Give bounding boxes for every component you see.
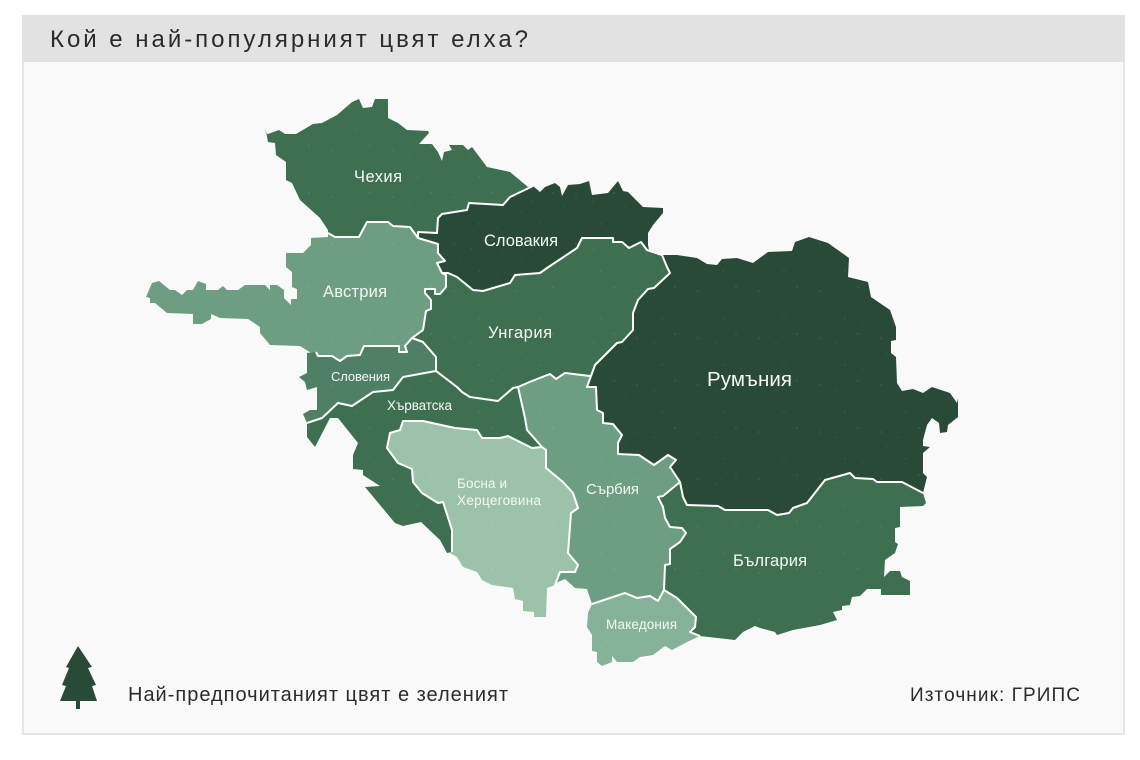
- footnote: preferred colour: Най-предпочитаният цвят е зеленият: [128, 684, 508, 706]
- region: Унгария: [412, 238, 670, 401]
- label: Босна и Херцеговина: Херцеговина: [457, 493, 541, 508]
- region: Австрия: [146, 222, 446, 361]
- label: Босна и Херцеговина: Босна и: [457, 476, 507, 491]
- region: Румъния: [587, 237, 958, 515]
- borders between countries: [307, 186, 923, 636]
- label: Австрия: Австрия: [323, 283, 387, 301]
- region: Македония: [587, 590, 700, 666]
- region: Словения: [299, 338, 436, 423]
- label: Румъния: Румъния: [707, 368, 792, 391]
- label: България: България: [733, 552, 807, 570]
- label: Сърбия: Сърбия: [586, 481, 639, 498]
- label: Чехия: Чехия: [354, 168, 402, 186]
- map: [146, 99, 958, 666]
- region: България: [658, 473, 926, 640]
- region: Сърбия: [518, 373, 686, 604]
- title: Кой е най-популярният цвят елха?: [50, 26, 528, 53]
- header bar: [22, 15, 1125, 62]
- source: Източник: ГРИПС: [910, 685, 1080, 706]
- label: Словакия: Словакия: [484, 232, 558, 250]
- region: Словакия: [418, 181, 663, 291]
- label: Македония: Македония: [606, 617, 677, 632]
- icon: tree: [60, 646, 97, 709]
- region: Хърватска: [307, 371, 560, 553]
- label: Босна и Херцеговина: [457, 476, 541, 508]
- label: Хърватска: Хърватска: [387, 398, 452, 413]
- region: Чехия: [265, 99, 533, 238]
- label: Словения: Словения: [331, 369, 390, 384]
- label: Унгария: Унгария: [488, 324, 552, 342]
- region: Босна и Херцеговина: [387, 421, 578, 617]
